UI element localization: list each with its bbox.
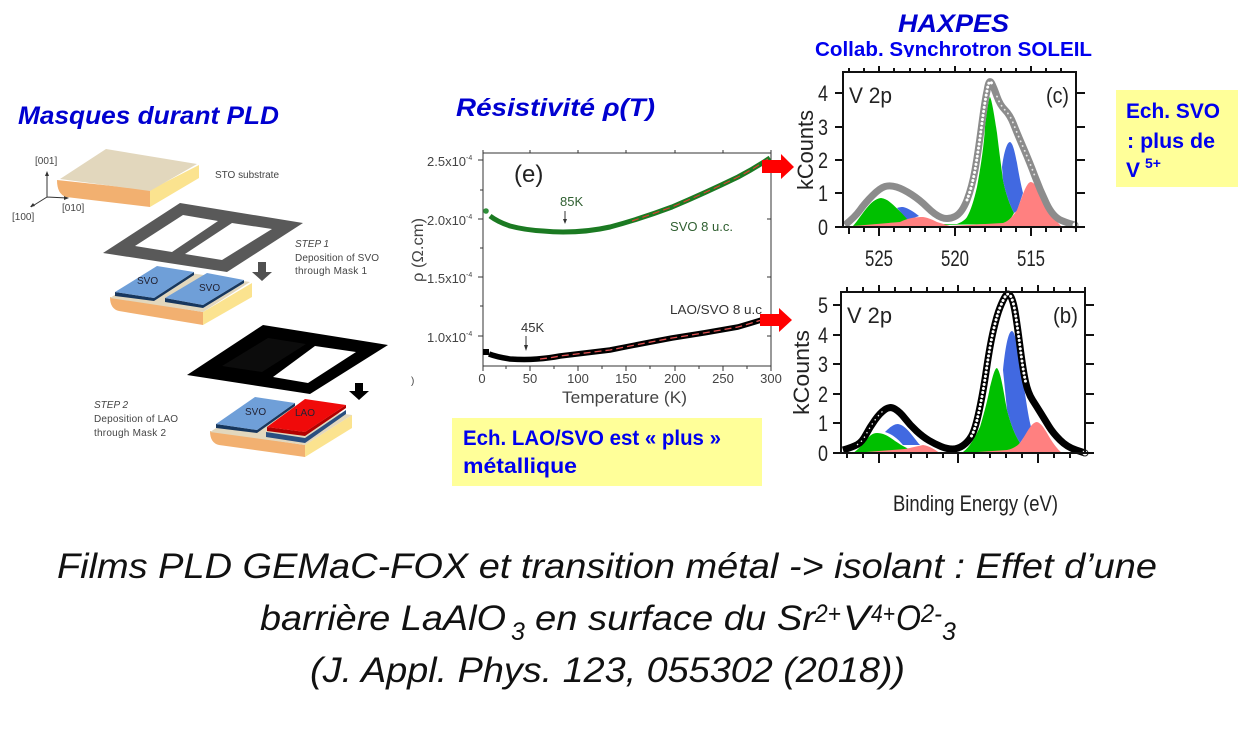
substrate with two SVO films: SVO	[199, 283, 220, 294]
conclusion text: 4+	[871, 600, 895, 628]
chart: HAXPES spectrum c	[793, 66, 1085, 271]
text: step 2: through Mask 2	[94, 428, 166, 439]
text: step 1: through Mask 1	[295, 266, 367, 277]
conclusion text: en surface du Sr	[535, 599, 816, 638]
text: step 1: STEP 1	[295, 239, 329, 250]
y axis labels: )	[411, 376, 414, 387]
data points c	[845, 82, 1078, 228]
heading: HAXPES: HAXPES	[898, 10, 1009, 38]
axis labels b: kCounts	[789, 330, 814, 415]
axis labels b: 1	[818, 411, 828, 436]
callout: SVO more V5+: V	[1126, 159, 1140, 182]
x axis labels	[478, 371, 782, 386]
heading: Résistivité: Résistivité ρ(T)	[456, 94, 655, 122]
y axis title: ρ (Ω.cm)	[410, 218, 427, 282]
annotation: 85K	[560, 194, 583, 224]
y axis labels: -4	[466, 272, 472, 279]
substrate with SVO and LAO films	[210, 397, 352, 457]
text: step 2	[94, 400, 178, 439]
conclusion text: 2+	[814, 600, 841, 628]
axis labels c: 0	[818, 215, 828, 240]
curve: SVO	[483, 158, 770, 232]
conclusion text: Films PLD GEMaC-FOX et transition métal -> isolant : Effet d’une	[57, 547, 1157, 586]
callout: SVO more V5+: : plus de	[1127, 130, 1215, 153]
curve: LAO/SVO	[483, 318, 768, 360]
subheading: Collab. Synchrotron SOLEIL: Collab. Synchrotron SOLEIL	[815, 39, 1092, 61]
x axis labels: 50	[523, 371, 537, 386]
callout: LAO/SVO more metallic: Ech. LAO/SVO est « plus »	[463, 427, 721, 450]
axis labels c: 1	[818, 181, 828, 206]
conclusion text: 2-	[920, 600, 942, 628]
x axis title: Temperature (K)	[562, 388, 687, 407]
substrate with SVO and LAO films: LAO	[295, 408, 315, 419]
frame c	[843, 72, 1076, 227]
conclusion text: (J. Appl. Phys. 123, 055302 (2018))	[310, 651, 905, 690]
heading: Masques durant PLD: Masques durant PLD	[18, 102, 279, 130]
axis labels c: 4	[818, 81, 828, 106]
conclusion text: barrière LaAlO	[260, 599, 506, 638]
y axis labels	[411, 154, 472, 387]
axis labels b: 2	[818, 382, 828, 407]
conclusion text	[57, 547, 1157, 690]
x axis labels: 200	[664, 371, 686, 386]
x axis labels: 300	[760, 371, 782, 386]
callout: LAO/SVO more metallic: métallique	[463, 455, 577, 478]
annotation: 45K: 45K	[521, 320, 544, 335]
arrow: LAO/SVO to HAXPES b	[760, 308, 792, 332]
y axis labels: 1.5x10	[427, 271, 466, 286]
annotation: 85K: 85K	[560, 194, 583, 209]
callout: SVO more V5+: Ech. SVO	[1126, 100, 1220, 123]
panel label e: (e)	[514, 161, 543, 188]
y axis labels: 1.0x10	[427, 330, 466, 345]
icon: crystal axes: [001]	[35, 156, 57, 167]
text: step 1: Deposition of SVO	[295, 253, 379, 264]
mask 2	[187, 325, 388, 394]
panel: mask deposition schematic	[12, 149, 388, 457]
axis labels c: V 2p	[849, 83, 892, 108]
substrate with two SVO films	[110, 266, 252, 325]
data points b	[843, 294, 1088, 456]
y axis labels: -4	[466, 214, 472, 221]
fit components c	[853, 97, 1062, 227]
icon: crystal axes: [010]	[62, 203, 84, 214]
conclusion text: V	[843, 599, 874, 638]
axis labels b: 4	[818, 323, 828, 348]
callout: LAO/SVO more metallic	[452, 418, 762, 486]
label: STO substrate: STO substrate	[215, 170, 279, 181]
axis labels c: 3	[818, 115, 828, 140]
axis labels c: 515	[1017, 246, 1045, 271]
axis labels c: (c)	[1046, 83, 1069, 108]
x axis labels: 0	[478, 371, 486, 386]
axis labels b: 3	[818, 352, 828, 377]
axis labels b	[789, 293, 1078, 516]
axis labels c	[793, 81, 1069, 271]
y axis labels: 2.5x10	[427, 154, 466, 169]
annotation: LAO/SVO 8 u.c.: LAO/SVO 8 u.c	[670, 302, 763, 317]
axis labels c: 520	[941, 246, 969, 271]
text: step 2: Deposition of LAO	[94, 414, 178, 425]
callout: SVO more V5+: 5+	[1145, 155, 1161, 171]
axis labels b: 0	[818, 441, 828, 466]
substrate: STO	[57, 149, 199, 207]
x axis labels: 150	[615, 371, 637, 386]
axis labels b: (b)	[1053, 303, 1078, 328]
text: step 2: STEP 2	[94, 400, 129, 411]
mask 1	[103, 203, 303, 272]
annotation: SVO 8 u.c.: SVO 8 u.c.	[670, 219, 733, 234]
icon: crystal axes	[12, 156, 84, 223]
x axis labels: 250	[712, 371, 734, 386]
substrate with SVO and LAO films: SVO	[245, 407, 266, 418]
conclusion text: 3	[942, 618, 956, 646]
chart: resistivity vs temperature	[410, 150, 782, 407]
conclusion text: O	[896, 599, 921, 638]
text: step 1	[295, 239, 379, 277]
y axis labels: 2.0x10	[427, 213, 466, 228]
axis labels b: V 2p	[847, 303, 892, 328]
y axis labels: -4	[466, 331, 472, 338]
axis labels b: 5	[818, 293, 828, 318]
frame b	[841, 292, 1085, 453]
annotation: 45K	[521, 320, 544, 351]
fit components b	[853, 331, 1062, 453]
axis labels c: kCounts	[793, 110, 818, 190]
arrow: step 1	[252, 262, 272, 281]
chart: HAXPES spectrum b	[789, 285, 1094, 516]
axis labels c: 525	[865, 246, 893, 271]
x axis labels: 100	[567, 371, 589, 386]
substrate with two SVO films: SVO	[137, 276, 158, 287]
arrow: SVO to HAXPES c	[762, 154, 794, 179]
y axis labels: -4	[466, 155, 472, 162]
icon: crystal axes: [100]	[12, 212, 34, 223]
axis labels b: Binding Energy (eV)	[893, 491, 1058, 516]
arrow: step 2	[349, 383, 369, 400]
callout: SVO more V5+	[1116, 90, 1238, 187]
axis labels c: 2	[818, 148, 828, 173]
conclusion text: 3	[511, 618, 525, 646]
